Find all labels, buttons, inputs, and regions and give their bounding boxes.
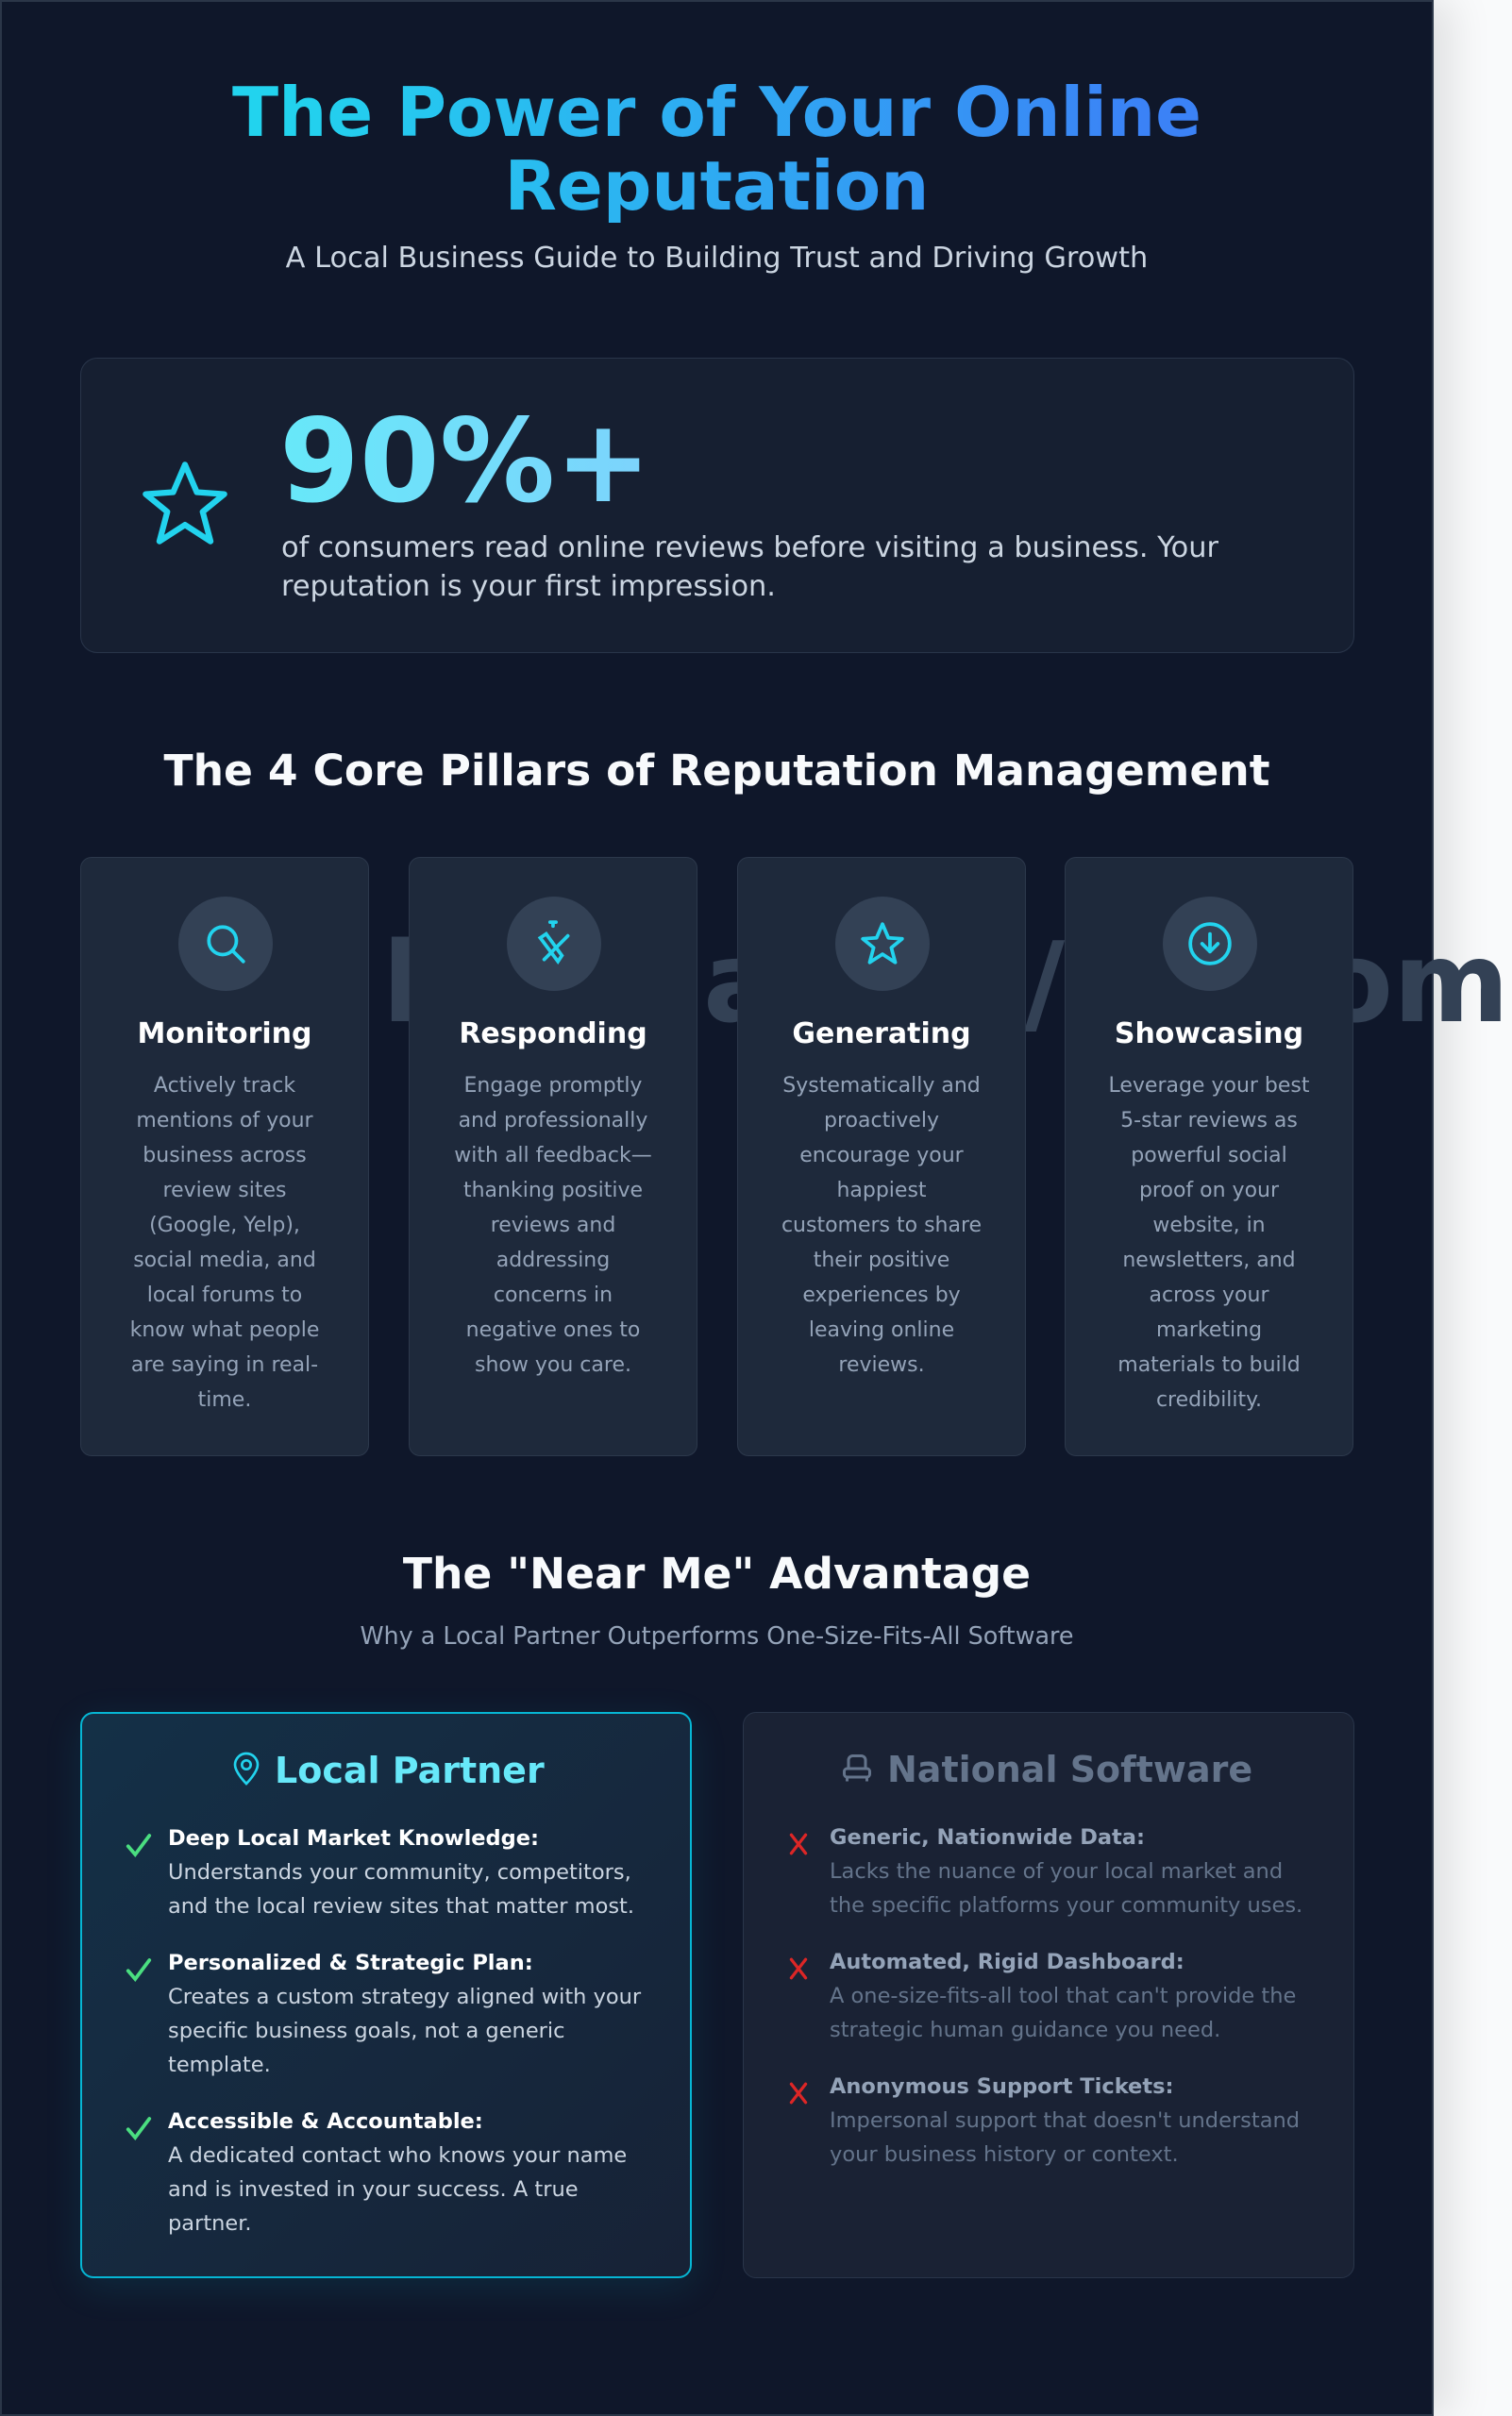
panel: showcasing: across your	[1150, 1284, 1268, 1307]
title	[0, 76, 1434, 223]
panel: showcasing: 5-star reviews as	[1120, 1109, 1298, 1132]
heading: national software: National Software	[887, 1749, 1252, 1790]
stat text: reputation is your first impression.	[281, 570, 776, 603]
panel: responding: thanking positive	[463, 1179, 643, 1202]
panel: monitoring: know what people	[130, 1318, 319, 1342]
item 3: Anonymous Support Tickets:	[830, 2074, 1173, 2099]
panel: generating: proactively	[824, 1109, 939, 1132]
item 2: specific business goals, not a generic	[168, 2019, 565, 2043]
stat text	[281, 531, 1218, 603]
panel: responding: addressing	[496, 1249, 610, 1272]
item 1	[168, 1826, 634, 1919]
panel: monitoring: Actively track	[154, 1074, 295, 1098]
panel: monitoring: mentions of your	[136, 1109, 313, 1132]
panel: generating: experiences by	[802, 1284, 961, 1307]
text: om	[1317, 917, 1509, 1048]
item 2: Automated, Rigid Dashboard:	[830, 1950, 1184, 1974]
panel: generating: encourage your	[799, 1144, 964, 1167]
icon: download circle	[1163, 897, 1257, 991]
panel: showcasing: marketing	[1156, 1318, 1262, 1342]
panel: responding: concerns in	[494, 1284, 613, 1307]
panel: showcasing: Leverage your best	[1108, 1074, 1310, 1098]
title: Reputation	[505, 146, 929, 226]
subheading: Why a Local Partner Outperforms One-Size-Fits-All Software	[360, 1621, 1074, 1650]
item 2	[830, 1950, 1296, 2042]
icon: pen	[507, 897, 601, 991]
panel: generating: their positive	[814, 1249, 949, 1272]
panel: responding: show you care.	[475, 1353, 631, 1377]
item 1: Generic, Nationwide Data:	[830, 1825, 1145, 1850]
panel: monitoring: are saying in real-	[131, 1353, 318, 1377]
item 2: Creates a custom strategy aligned with your	[168, 1985, 641, 2009]
icons: crosses	[789, 1833, 808, 2105]
item 1: Deep Local Market Knowledge:	[168, 1826, 539, 1851]
item 1	[830, 1825, 1302, 1918]
item 1: Lacks the nuance of your local market and	[830, 1859, 1283, 1884]
item 2: template.	[168, 2053, 271, 2077]
panel: monitoring: review sites	[163, 1179, 286, 1202]
item 1: Understands your community, competitors,	[168, 1860, 631, 1885]
watermark	[382, 917, 1509, 1048]
panel: responding	[409, 857, 697, 1456]
text: /	[1024, 917, 1065, 1048]
panel: responding: negative ones to	[466, 1318, 640, 1342]
panel: showcasing: proof on your	[1139, 1179, 1279, 1202]
stat number: 90%+	[279, 394, 651, 528]
subtitle: A Local Business Guide to Building Trust and Driving Growth	[286, 242, 1148, 275]
panel: local partner	[80, 1712, 692, 2278]
item 3: A dedicated contact who knows your name	[168, 2143, 627, 2168]
panel: showcasing: website, in	[1152, 1214, 1266, 1237]
item 2: A one-size-fits-all tool that can't provide the	[830, 1984, 1296, 2008]
icon: star	[143, 461, 227, 545]
panel: monitoring: local forums to	[147, 1284, 302, 1307]
icon: magnifier	[178, 897, 273, 991]
panel: generating: happiest	[836, 1179, 927, 1202]
panel: generating: reviews.	[838, 1353, 925, 1377]
panel: responding: Engage promptly	[464, 1074, 642, 1098]
title: The Power of Your Online	[232, 73, 1201, 152]
panel: showcasing: Showcasing	[1115, 1017, 1303, 1050]
panel: responding: Responding	[459, 1017, 647, 1050]
item 3: your business history or context.	[830, 2142, 1179, 2167]
panel: stat card	[80, 358, 1354, 653]
panel: monitoring: social media, and	[133, 1249, 316, 1272]
text: a	[703, 917, 779, 1048]
panel: monitoring: business across	[143, 1144, 307, 1167]
panel: showcasing: powerful social	[1131, 1144, 1287, 1167]
heading: local partner: Local Partner	[275, 1750, 545, 1791]
panel: showcasing: newsletters, and	[1122, 1249, 1296, 1272]
panel: generating: customers to share	[781, 1214, 982, 1237]
panel: generating: leaving online	[809, 1318, 954, 1342]
item 3: Accessible & Accountable:	[168, 2109, 483, 2134]
panel: monitoring: Monitoring	[138, 1017, 311, 1050]
panel: showcasing: materials to build	[1117, 1353, 1301, 1377]
icons: checks	[126, 1834, 151, 2140]
item 1: and the local review sites that matter most.	[168, 1894, 634, 1919]
panel: monitoring: (Google, Yelp),	[149, 1214, 300, 1237]
item 3: and is invested in your success. A true	[168, 2177, 579, 2202]
item 3	[168, 2109, 627, 2236]
panel: responding: reviews and	[491, 1214, 615, 1237]
heading: near me: The "Near Me" Advantage	[403, 1549, 1031, 1599]
item 3	[830, 2074, 1300, 2167]
item 2	[168, 1951, 642, 2077]
panel: generating	[737, 857, 1026, 1456]
heading: pillars: The 4 Core Pillars of Reputation Management	[164, 746, 1270, 796]
icon: seat	[843, 1754, 871, 1782]
panel: generating: Generating	[792, 1017, 971, 1050]
panel: showcasing: credibility.	[1156, 1388, 1262, 1412]
item 3: Impersonal support that doesn't understand	[830, 2108, 1300, 2133]
panel: responding: and professionally	[459, 1109, 647, 1132]
stat text: of consumers read online reviews before visiting a business. Your	[281, 531, 1218, 564]
panel: responding: with all feedback—	[454, 1144, 652, 1167]
text: l	[382, 917, 420, 1048]
panel: generating: Systematically and	[782, 1074, 981, 1098]
item 3: partner.	[168, 2211, 252, 2236]
icon: star	[835, 897, 930, 991]
item 2: Personalized & Strategic Plan:	[168, 1951, 533, 1975]
panel: national software	[743, 1712, 1354, 2278]
icon: pin	[234, 1752, 259, 1786]
item 2: strategic human guidance you need.	[830, 2018, 1220, 2042]
item 1: the specific platforms your community uses.	[830, 1893, 1302, 1918]
panel: showcasing	[1065, 857, 1353, 1456]
panel: monitoring: time.	[198, 1388, 251, 1412]
panel: monitoring	[80, 857, 369, 1456]
